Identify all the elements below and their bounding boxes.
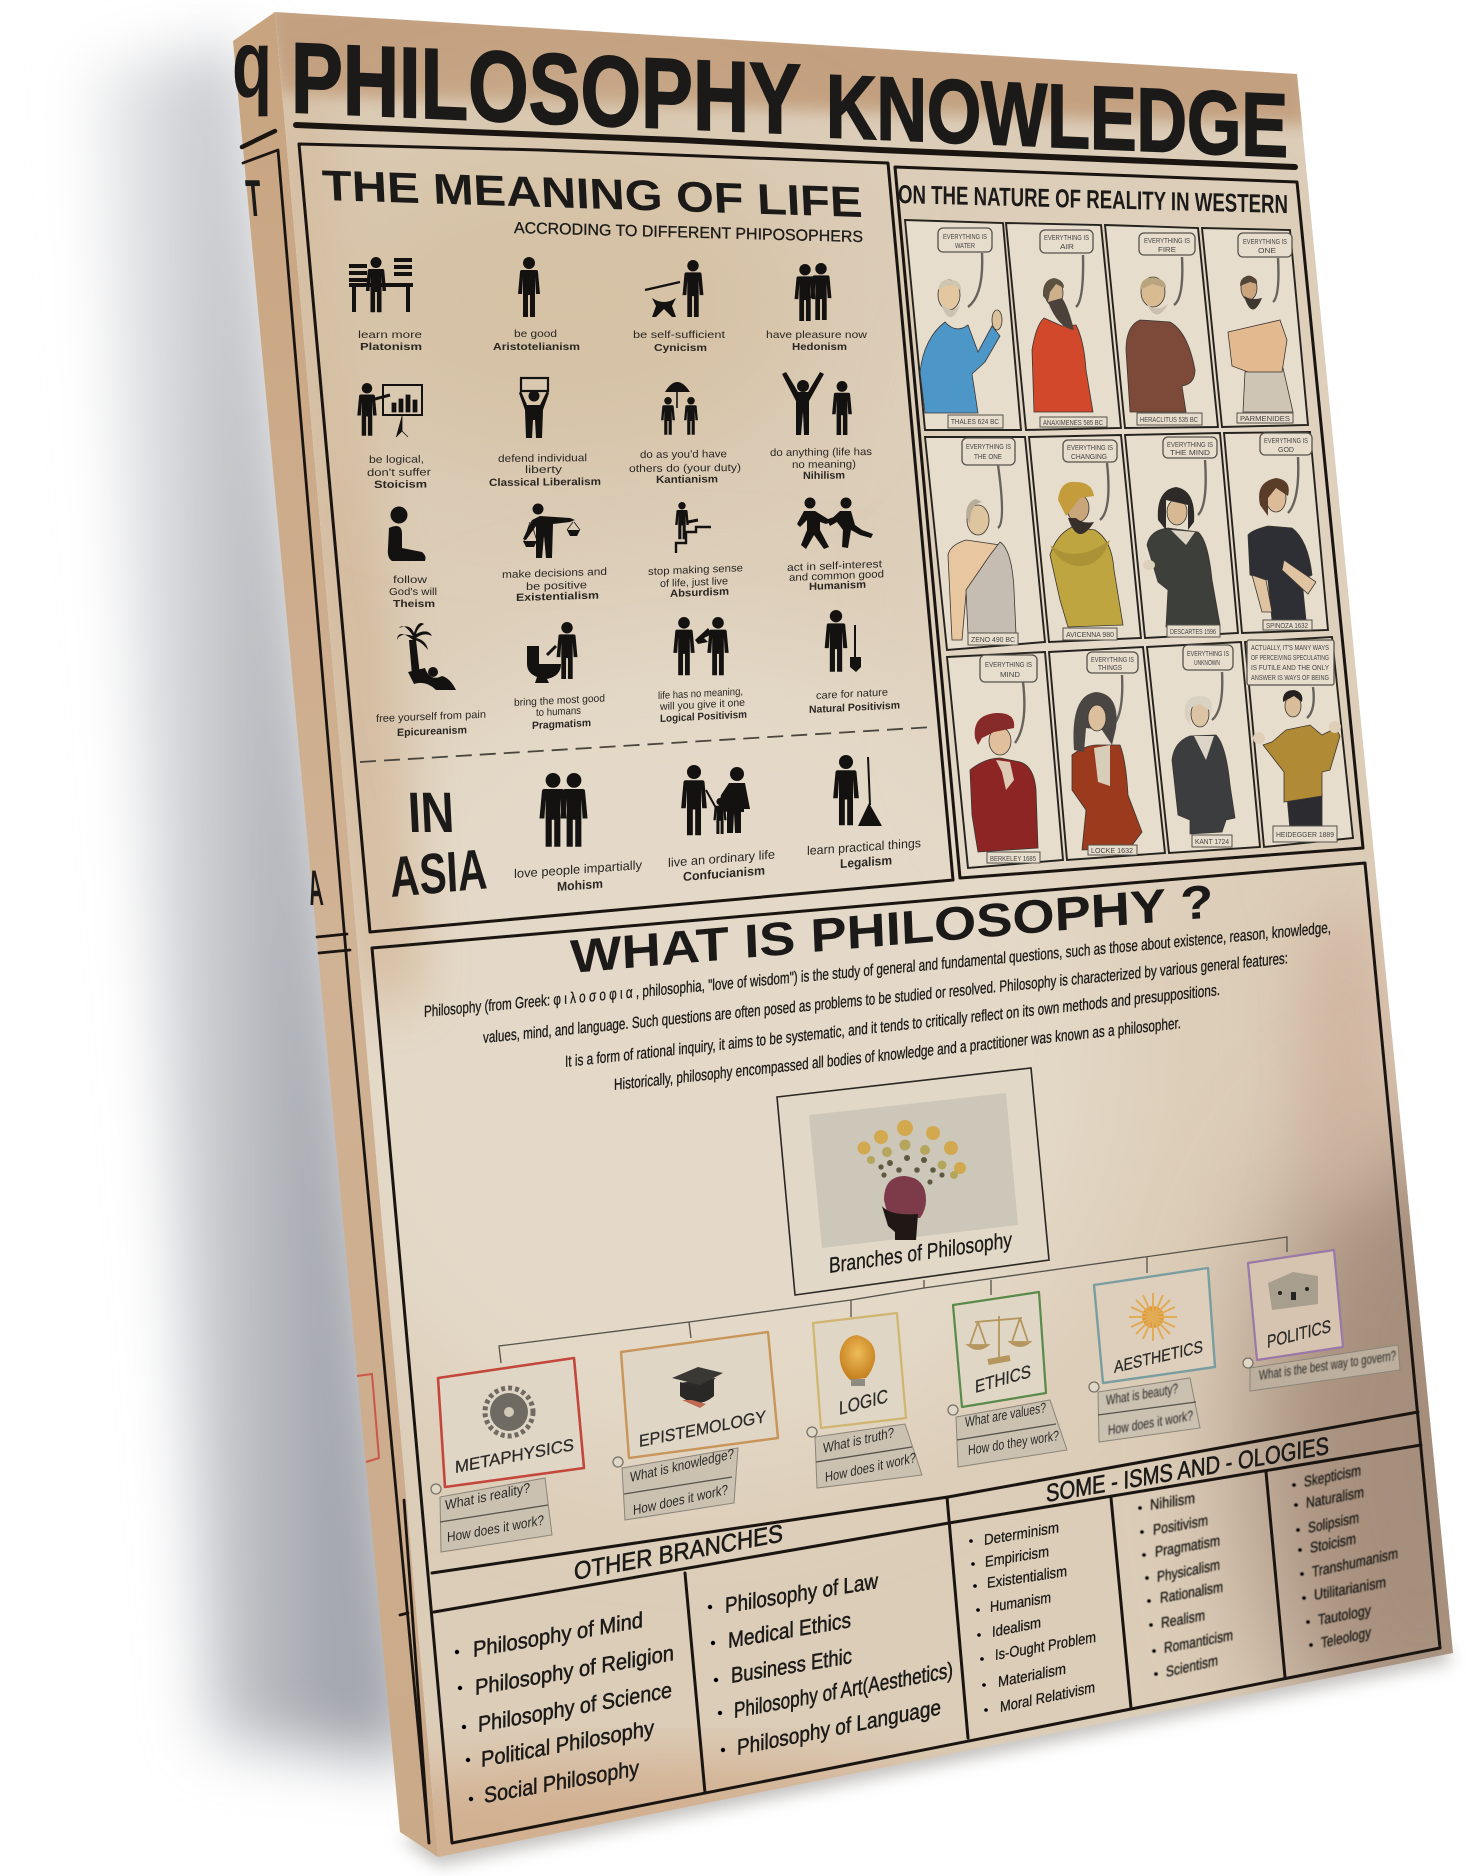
comic panel 10: wig: EVERYTHING IS: [1091, 657, 1134, 664]
list column 3: Stoicism: [1310, 1530, 1356, 1557]
list left: Political Philosophy: [481, 1715, 655, 1772]
list column 3: Teleology: [1321, 1624, 1371, 1652]
branch: metaphysics: What is reality?: [445, 1479, 530, 1513]
labels asia: Legalism: [840, 853, 892, 871]
branch: aesthetics: AESTHETICS: [1114, 1336, 1203, 1377]
comic panel 12: yellow jacket: ANSWER IS WAYS OF BEING: [1251, 675, 1329, 682]
branch: aesthetics: [1089, 1268, 1215, 1442]
icon: light bulb: [840, 1335, 875, 1386]
labels asia: live an ordinary life: [668, 847, 775, 870]
list right: Philosophy of Art(Aesthetics): [734, 1657, 953, 1723]
branch: aesthetics: What is beauty?: [1106, 1380, 1178, 1408]
comic panel 8: dark jacket: [1224, 432, 1328, 633]
icon: government building: [1268, 1272, 1318, 1310]
panel: the meaning of life: [321, 162, 933, 910]
comic panel 12: yellow jacket: ACTUALLY, IT'S MANY WAYS: [1251, 645, 1329, 652]
branch: epistemology: [613, 1332, 778, 1520]
comic panel 7: black coat: [1125, 433, 1238, 638]
comic panel 11: grey coat: EVERYTHING IS: [1187, 651, 1229, 658]
labels row 3: Humanism: [809, 579, 866, 593]
list column 1: Existentialism: [987, 1563, 1067, 1592]
list left: [455, 1607, 674, 1808]
comic panel 3: brown robe: HERACLITUS 535 BC: [1140, 417, 1198, 424]
labels row 2: be logical,: [369, 453, 424, 466]
canvas side face: T: [244, 170, 264, 228]
labels row 4: Natural Positivism: [809, 699, 900, 716]
body paragraph: It is a form of rational inquiry, it aims to be systematic, and it tends to critically reflect on its own methods and presuppositions.: [565, 981, 1220, 1071]
branch: ethics: How do they work?: [968, 1427, 1059, 1458]
comic panel 5: white cloth: ZENO 490 BC: [971, 637, 1015, 644]
branch: epistemology: What is knowledge?: [630, 1446, 734, 1486]
comic panel 11: grey coat: KANT 1724: [1195, 839, 1229, 846]
comic panel 4: bare chest: ONE: [1258, 248, 1276, 255]
list column 2: Realism: [1161, 1607, 1205, 1632]
heading: the meaning of life: THE MEANING OF LIFE: [321, 162, 863, 227]
list left: Philosophy of Religion: [475, 1640, 674, 1700]
icon: toilet pragmatism: [527, 622, 577, 683]
icon: be good: [518, 257, 540, 317]
title: KNOWLEDGE: [826, 56, 1288, 177]
comic panel 6: yellow turban: AVICENNA 980: [1066, 632, 1114, 639]
labels row 3: God's will: [389, 586, 437, 598]
heading: in asia: [388, 781, 489, 910]
icon: learn more: [349, 257, 413, 312]
list column 2: [1138, 1490, 1233, 1681]
list column 2: Physicalism: [1157, 1557, 1220, 1586]
panel: what is philosophy: [424, 874, 1400, 1552]
labels row 1: be good: [514, 328, 557, 340]
icon: sun: [1129, 1293, 1177, 1341]
comic panel 1: blue robe: EVERYTHING IS: [943, 234, 987, 241]
icon: mohism two people: [539, 773, 588, 847]
labels row 1: be self-sufficient: [633, 329, 725, 341]
list column 2: Scientism: [1166, 1652, 1218, 1681]
list column 3: Solipsism: [1308, 1509, 1359, 1537]
labels row 3: make decisions and: [502, 566, 607, 581]
labels row 4: Logical Positivism: [660, 709, 747, 725]
labels row 4: Epicureanism: [397, 724, 467, 739]
panel: some isms and ologies: [969, 1432, 1398, 1716]
labels row 3: Existentialism: [516, 590, 599, 604]
list column 1: Determinism: [984, 1519, 1059, 1549]
comic panel 7: black coat: THE MIND: [1170, 450, 1210, 457]
branch: politics: What is the best way to govern?: [1259, 1347, 1396, 1383]
comic panel 2: red robe: [1006, 223, 1121, 430]
labels row 1: learn more: [358, 329, 422, 341]
list left: Philosophy of Mind: [473, 1607, 643, 1662]
list column 1: Is-Ought Problem: [995, 1629, 1096, 1664]
icon: be logical: [357, 383, 422, 437]
branch: metaphysics: How does it work?: [447, 1512, 544, 1545]
icon: decisions scale: [523, 504, 580, 558]
labels row 4: [376, 686, 900, 739]
list right: [708, 1568, 953, 1760]
icon: palm epicureanism: [397, 623, 456, 690]
labels row 2: [367, 446, 872, 491]
list column 1: Idealism: [992, 1614, 1041, 1641]
canvas side face: A: [306, 860, 325, 916]
branch: politics: POLITICS: [1267, 1315, 1331, 1352]
title: PHILOSOPHY: [291, 22, 801, 156]
heading: in asia: ASIA: [388, 837, 489, 910]
subheading: ACCRODING TO DIFFERENT PHIPOSOPHERS: [514, 220, 863, 246]
labels asia: Mohism: [557, 877, 603, 894]
comic panel 9: red hat: EVERYTHING IS: [985, 662, 1032, 669]
labels row 2: Stoicism: [374, 478, 427, 491]
icon: kneeling follow god: [388, 506, 426, 561]
labels row 2: Classical Liberalism: [489, 476, 601, 489]
labels row 4: free yourself from pain: [376, 709, 486, 725]
comic panel 12: yellow jacket: HEIDEGGER 1889: [1276, 832, 1334, 839]
labels row 3: stop making sense: [648, 562, 743, 578]
list column 3: [1292, 1462, 1398, 1652]
labels row 3: be positive: [526, 579, 587, 593]
labels row 2: Nihilism: [803, 470, 845, 482]
labels row 2: defend individual: [498, 452, 587, 465]
comic panel 11: grey coat: UNKNOWN: [1194, 660, 1220, 667]
labels row 2: others do (your duty): [629, 462, 741, 475]
labels row 2: Kantianism: [656, 473, 718, 486]
branch: ethics: What are values?: [965, 1399, 1046, 1430]
branch: logic: What is truth?: [823, 1425, 894, 1457]
comic panel 4: bare chest: [1202, 228, 1308, 427]
comic panel 2: red robe: ANAXIMENES 585 BC: [1043, 420, 1103, 427]
labels row 3: act in self-interest: [787, 558, 882, 574]
comic panel 10: wig: THINGS: [1098, 665, 1122, 672]
comic panel 12: yellow jacket: [1245, 637, 1353, 847]
branch: logic: LOGIC: [839, 1386, 888, 1420]
comic panel 7: black coat: DESCARTES 1596: [1170, 629, 1216, 636]
comic panel 10: wig: LOCKE 1632: [1091, 848, 1133, 855]
labels asia: Confucianism: [683, 863, 765, 884]
labels row 2: no meaning): [792, 458, 856, 471]
list column 1: Empiricism: [985, 1543, 1049, 1571]
list column 2: Rationalism: [1160, 1579, 1223, 1607]
labels row 1: have pleasure now: [766, 329, 867, 341]
icon: have pleasure now: [795, 263, 831, 321]
comic panel 2: red robe: EVERYTHING IS: [1044, 235, 1089, 242]
canvas side face: q: [232, 10, 272, 118]
list column 3: Tautology: [1318, 1602, 1371, 1629]
labels row 2: do anything (life has: [770, 446, 872, 459]
list column 1: Materialism: [998, 1661, 1066, 1691]
list column 2: Nihilism: [1150, 1490, 1195, 1514]
labels row 1: Cynicism: [654, 342, 707, 354]
comic panel 9: red hat: MIND: [1000, 672, 1020, 679]
comic panel 4: bare chest: EVERYTHING IS: [1243, 239, 1287, 246]
comic panel 9: red hat: [947, 652, 1063, 868]
comic panel 5: white cloth: [925, 437, 1045, 650]
body paragraph: Historically, philosophy encompassed all bodies of knowledge and a practitioner was known as a philosopher.: [614, 1014, 1181, 1094]
panel: other branches: [455, 1520, 953, 1808]
comic panel 5: white cloth: THE ONE: [974, 454, 1002, 461]
icon: confucianism family: [681, 765, 750, 835]
heading: other branches: OTHER BRANCHES: [574, 1520, 783, 1586]
labels row 1: Aristotelianism: [493, 341, 580, 353]
comic panel 6: yellow turban: [1029, 435, 1141, 642]
list right: Philosophy of Law: [725, 1568, 879, 1618]
list column 2: Pragmatism: [1155, 1532, 1220, 1561]
labels row 3: Theism: [393, 598, 435, 610]
branch: ethics: [948, 1292, 1067, 1467]
labels asia: learn practical things: [807, 836, 921, 858]
comic panel 11: grey coat: [1147, 642, 1260, 853]
list left: Philosophy of Science: [478, 1677, 672, 1737]
icon: graduation cap: [672, 1367, 723, 1408]
icon: person with shovel: [825, 610, 861, 672]
heading: isms and ologies: SOME - ISMS AND - OLOGIES: [1046, 1432, 1329, 1508]
list column 3: Transhumanism: [1312, 1545, 1398, 1581]
labels row 3: [389, 558, 884, 610]
list right: Philosophy of Language: [737, 1694, 941, 1760]
list right: Medical Ethics: [728, 1607, 851, 1653]
branch: logic: [807, 1313, 922, 1488]
icon: self-sufficient: [645, 260, 703, 317]
panel: on the nature of reality in western: [898, 179, 1353, 868]
comic panel 6: yellow turban: CHANGING: [1071, 454, 1107, 461]
branch: metaphysics: [431, 1358, 584, 1552]
labels row 2: don't suffer: [367, 466, 432, 479]
labels row 3: Absurdism: [670, 586, 729, 600]
icon: legalism broom: [833, 755, 882, 826]
list column 3: Skepticism: [1304, 1462, 1361, 1491]
comic panel 10: wig: [1049, 647, 1165, 860]
icon: defend liberty: [519, 378, 549, 438]
icon: do as you'd have: [661, 382, 698, 435]
labels row 4: life has no meaning,: [658, 686, 743, 702]
comic panel 3: brown robe: [1105, 225, 1218, 428]
comic panel 2: red robe: AIR: [1060, 244, 1074, 251]
labels row 2: liberty: [525, 464, 563, 476]
labels row 4: care for nature: [816, 686, 888, 702]
list right: Business Ethic: [731, 1643, 852, 1688]
branch: ethics: ETHICS: [975, 1360, 1031, 1397]
list column 3: Naturalism: [1306, 1484, 1364, 1512]
icon: head with idea dots: [858, 1120, 966, 1240]
icon: do anything: [782, 372, 852, 435]
heading: what is philosophy: WHAT IS PHILOSOPHY ?: [569, 874, 1214, 983]
comic panel 1: blue robe: THALES 624 BC: [951, 419, 999, 426]
list left: Social Philosophy: [484, 1755, 640, 1808]
list column 1: [969, 1519, 1096, 1716]
comic panel 8: dark jacket: EVERYTHING IS: [1264, 438, 1308, 445]
icon: two running: [797, 498, 873, 549]
canvas side face: [232, 10, 438, 1857]
comic panel 3: brown robe: FIRE: [1158, 247, 1176, 254]
list column 3: Utilitarianism: [1314, 1574, 1386, 1604]
icon: two with flower: [673, 617, 729, 675]
comic panel 8: dark jacket: SPINOZA 1632: [1266, 623, 1308, 630]
comic panel 6: yellow turban: EVERYTHING IS: [1067, 445, 1113, 452]
comic panel 3: brown robe: EVERYTHING IS: [1144, 238, 1190, 245]
comic panel 1: blue robe: [905, 220, 1021, 430]
icon: stairs: [675, 502, 711, 553]
branch: aesthetics: How does it work?: [1108, 1407, 1193, 1438]
list column 2: Positivism: [1153, 1512, 1208, 1539]
list column 1: Humanism: [990, 1589, 1051, 1616]
branch: epistemology: EPISTEMOLOGY: [639, 1406, 767, 1451]
comic panel 5: white cloth: EVERYTHING IS: [966, 444, 1011, 451]
comic panel 4: bare chest: PARMENIDES: [1240, 416, 1290, 423]
branch: epistemology: How does it work?: [633, 1482, 728, 1519]
branch: politics: [1243, 1250, 1400, 1391]
labels row 3: of life, just live: [660, 575, 728, 590]
branches of philosophy root box: [777, 1068, 1049, 1295]
labels row 2: do as you'd have: [640, 448, 727, 461]
icon: gear: [485, 1388, 533, 1436]
heading: in asia: IN: [406, 781, 456, 845]
labels row 4: to humans: [536, 705, 581, 719]
panel frames: [299, 144, 1440, 1843]
body paragraph: [424, 919, 1331, 1094]
labels row 3: and common good: [789, 568, 884, 584]
branch: logic: How does it work?: [825, 1450, 916, 1486]
labels row 1: [358, 328, 867, 354]
comic panel 8: dark jacket: GOD: [1278, 447, 1294, 454]
tree connector lines: [499, 1237, 1287, 1363]
labels row 4: Pragmatism: [532, 717, 591, 732]
comic panel 1: blue robe: WATER: [955, 243, 975, 250]
title: [291, 22, 1288, 177]
labels row 1: Platonism: [360, 341, 422, 353]
comic panel 9: red hat: BERKELEY 1685: [990, 856, 1036, 863]
labels row 4: will you give it one: [659, 697, 745, 713]
labels asia: [514, 836, 921, 894]
list column 2: Romanticism: [1164, 1627, 1233, 1657]
comic panel 12: yellow jacket: OF PERCEIVING SPECULATING: [1251, 655, 1329, 662]
heading: nature of reality: ON THE NATURE OF REALITY IN WESTERN: [898, 179, 1288, 219]
labels row 1: Hedonism: [792, 341, 847, 353]
branches of philosophy root box: Branches of Philosophy: [829, 1227, 1013, 1278]
labels asia: love people impartially: [514, 858, 643, 881]
comic panel 12: yellow jacket: IS FUTILE AND THE ONLY: [1251, 665, 1329, 672]
list column 1: Moral Relativism: [1000, 1679, 1095, 1716]
labels row 3: follow: [393, 574, 428, 586]
labels row 4: bring the most good: [514, 692, 605, 709]
branch: metaphysics: METAPHYSICS: [455, 1434, 574, 1477]
comic panel 7: black coat: EVERYTHING IS: [1167, 442, 1213, 449]
icon: scales: [968, 1316, 1030, 1362]
